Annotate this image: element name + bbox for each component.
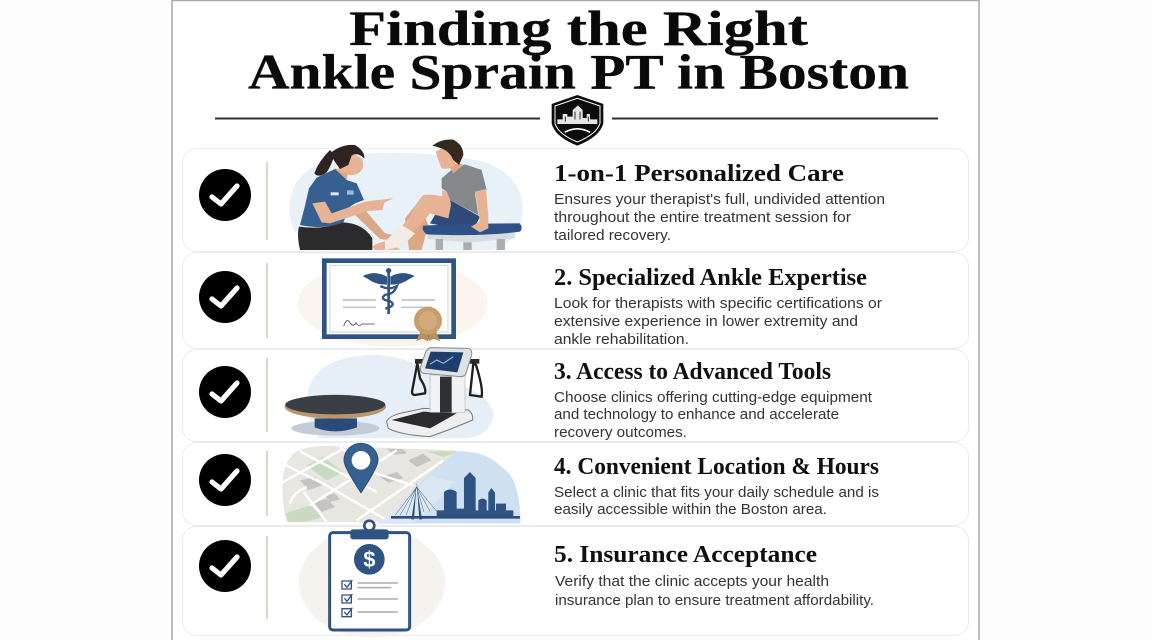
icon: shield logo	[552, 95, 603, 146]
heading 1: 1-on-1 Personalized Care	[554, 160, 844, 187]
body 1	[554, 192, 885, 244]
body 2: extensive experience in lower extremity and	[554, 314, 858, 330]
body 3: Choose clinics offering cutting-edge equipment	[554, 390, 872, 406]
divider 4	[266, 451, 268, 516]
title	[248, 0, 909, 100]
icon: check 4	[199, 454, 251, 506]
divider 1	[266, 162, 268, 240]
body 2: Look for therapists with specific certifications or	[554, 296, 882, 312]
body 2	[554, 296, 882, 348]
figure: therapist	[298, 145, 400, 250]
panel: row 5	[182, 521, 968, 638]
illustration: balance board and scanner	[285, 348, 494, 438]
icon: check 5	[199, 540, 251, 592]
title: Ankle Sprain PT in Boston	[248, 44, 909, 100]
title divider right	[612, 118, 938, 120]
figure: patient on table	[385, 139, 522, 250]
panel: row 3	[182, 348, 968, 442]
panel: row 2	[182, 252, 968, 348]
divider 2	[266, 263, 268, 338]
icon: check 3	[199, 366, 251, 418]
icon: check 1	[199, 169, 251, 221]
heading 2: 2. Specialized Ankle Expertise	[554, 264, 867, 291]
illustration: map with pin and skyline	[280, 443, 521, 524]
body 3: and technology to enhance and accelerate	[554, 407, 839, 423]
illustration: insurance clipboard	[299, 521, 445, 638]
heading 3: 3. Access to Advanced Tools	[554, 358, 831, 385]
title divider left	[215, 118, 540, 120]
body 4: easily accessible within the Boston area.	[554, 502, 827, 518]
body 1: Ensures your therapist's full, undivided attention	[554, 192, 885, 208]
title: Finding the Right	[349, 0, 808, 56]
divider 5	[266, 536, 268, 619]
heading 5: 5. Insurance Acceptance	[554, 541, 817, 568]
body 1: tailored recovery.	[554, 228, 671, 244]
body 5	[555, 574, 874, 609]
illustration: insurance clipboard: $	[363, 547, 375, 572]
icon: check 2	[199, 271, 251, 323]
body 5: Verify that the clinic accepts your health	[555, 574, 829, 590]
body 2: ankle rehabilitation.	[554, 332, 689, 348]
body 4: Select a clinic that fits your daily schedule and is	[554, 485, 879, 501]
body 3	[554, 390, 872, 441]
illustration: certificate	[298, 260, 488, 347]
divider 3	[266, 358, 268, 432]
illustration: therapist and patient	[289, 139, 523, 250]
body 5: insurance plan to ensure treatment affordability.	[555, 593, 874, 609]
equipment: balance board	[285, 355, 494, 438]
body 1: throughout the entire treatment session for	[554, 210, 851, 226]
equipment: body scanner	[387, 348, 482, 437]
body 4	[554, 485, 879, 518]
panel: page sheet	[172, 0, 979, 640]
panel: row 4	[182, 442, 968, 526]
heading 4: 4. Convenient Location & Hours	[554, 453, 879, 480]
body 3: recovery outcomes.	[554, 425, 687, 441]
panel: row 1	[182, 139, 968, 252]
